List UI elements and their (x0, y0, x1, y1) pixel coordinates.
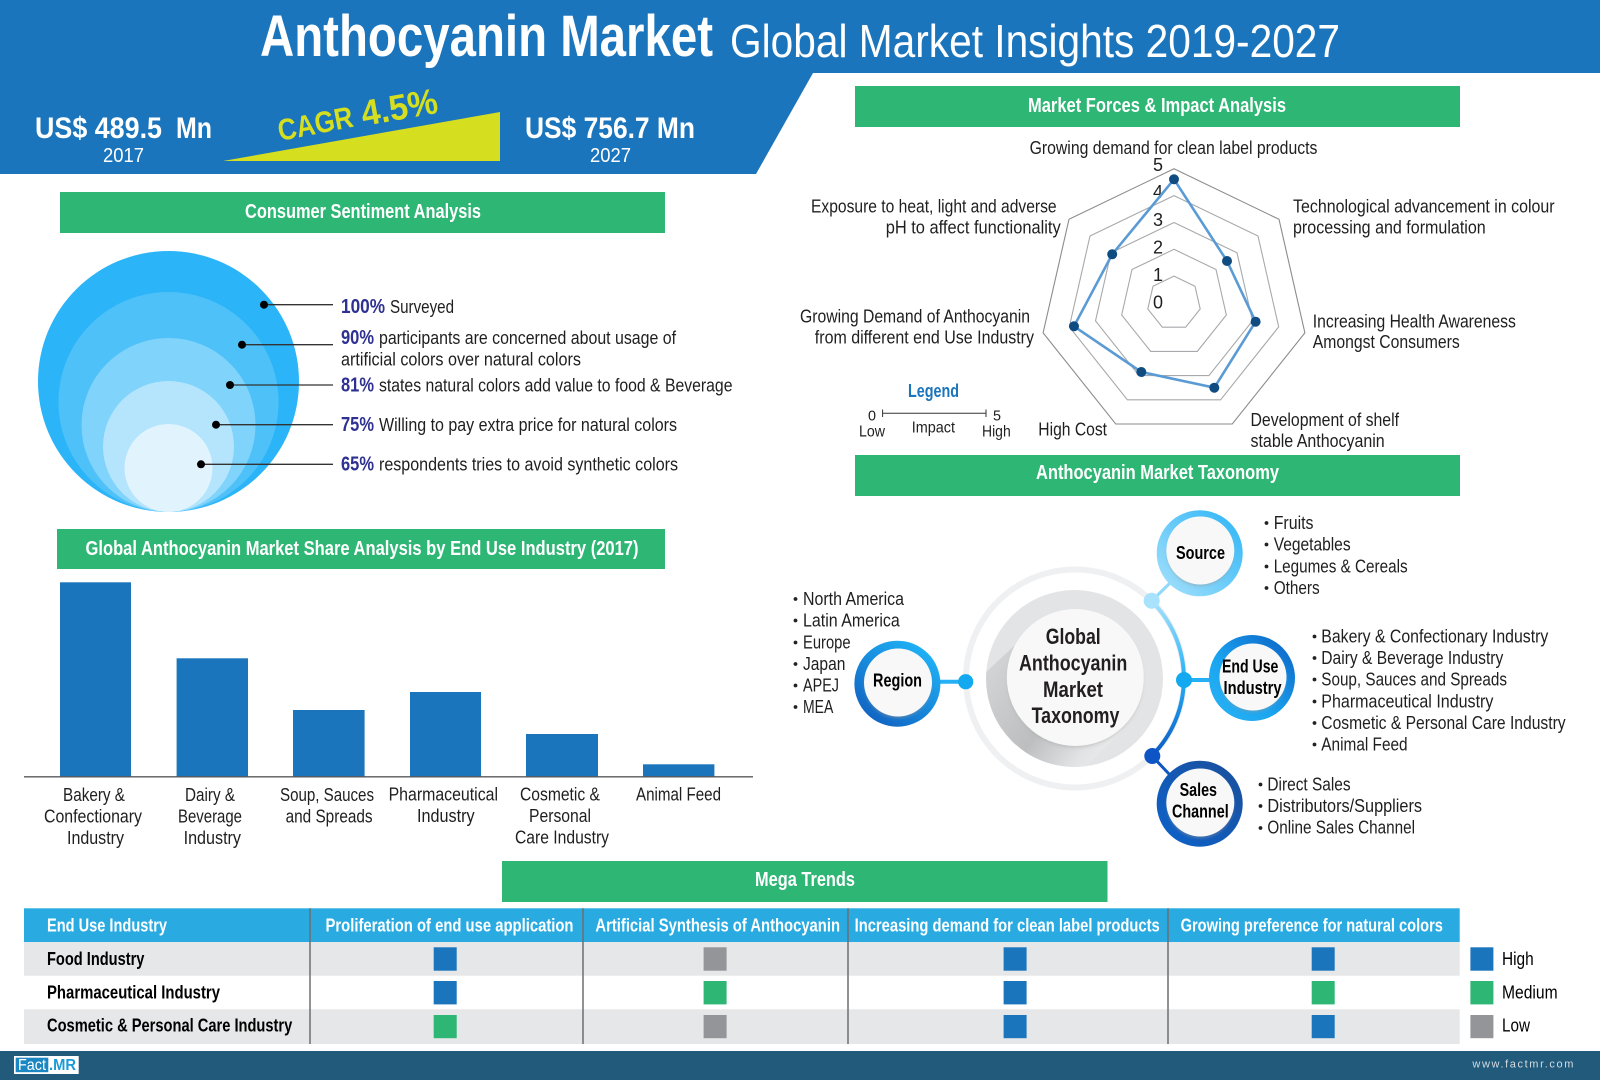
radar label: technological advancement (1293, 196, 1555, 238)
hub title: Taxonomy (1032, 703, 1120, 728)
sentiment callout: 90% (238, 327, 677, 370)
node: end use industry (1176, 635, 1295, 721)
list: region (794, 589, 905, 717)
heading: consumer sentiment: Consumer Sentiment Analysis (245, 201, 481, 223)
node: sales channel: Channel (1172, 802, 1229, 822)
logo: Fact.MR: .MR (49, 1057, 76, 1074)
radar legend: Impact (912, 419, 956, 436)
radar label: technological advancement: Technological advancement in colour (1293, 196, 1555, 216)
sentiment callout: 90%: participants are concerned about usage of (379, 328, 677, 348)
row: pharmaceutical industry (47, 981, 1335, 1004)
radar legend: 0 (868, 408, 876, 425)
stat: 2017 market value: US$ 489.5 (35, 112, 162, 145)
table legend: High (1502, 949, 1534, 969)
list: sales channel (1259, 775, 1422, 838)
table legend (1470, 947, 1558, 1038)
bar label: bakery: Bakery & (63, 785, 125, 805)
radar label: health awareness: Increasing Health Awareness (1313, 312, 1516, 332)
logo: Fact.MR: Fact (18, 1057, 46, 1074)
radar legend: 5 (993, 408, 1001, 425)
sentiment callout: 100% (260, 296, 454, 318)
radar axis numbers (1153, 155, 1163, 312)
sentiment callout: 81%: states natural colors add value to food & Beverage (379, 376, 732, 396)
list: region: North America (803, 589, 905, 609)
bar label: cosmetic: Care Industry (515, 828, 609, 848)
bar label: animal feed: Animal Feed (636, 784, 721, 804)
node: end use industry: End Use (1222, 656, 1278, 676)
list: source: Vegetables (1274, 535, 1351, 555)
list: sales channel: Online Sales Channel (1267, 818, 1415, 838)
heading: market share: Global Anthocyanin Market Share Analysis by End Use Industry (2017) (86, 538, 638, 560)
heading: taxonomy: Anthocyanin Market Taxonomy (1036, 462, 1280, 484)
row: food industry (47, 947, 1335, 971)
radar data series (1069, 174, 1261, 393)
title (260, 4, 1340, 69)
radar label: technological advancement: processing and formulation (1293, 218, 1486, 238)
list: end use industry: Animal Feed (1321, 735, 1408, 755)
list: source (1265, 513, 1408, 598)
sentiment callout: 90%: 90% (341, 327, 374, 349)
radar legend (859, 381, 1011, 441)
bar label: cosmetic: Cosmetic & (520, 784, 600, 804)
stat: 2017 market value: Mn (176, 112, 212, 145)
node: source (1144, 510, 1243, 609)
radar label: health awareness: Amongst Consumers (1313, 332, 1460, 352)
list: sales channel: Distributors/Suppliers (1267, 796, 1422, 816)
radar label: shelf stable (1250, 410, 1400, 451)
mega trends table (24, 908, 1460, 1044)
nested circles chart (38, 251, 299, 512)
list: end use industry: Bakery & Confectionary Industry (1321, 626, 1548, 646)
radar label: exposure: Exposure to heat, light and adverse (811, 196, 1057, 216)
row: food industry: Food Industry (47, 949, 144, 969)
radar label: shelf stable: Development of shelf (1250, 410, 1400, 430)
heading: market forces (855, 86, 1460, 127)
website url: www.factmr.com (1471, 1058, 1573, 1070)
table legend: Low (1502, 1016, 1531, 1036)
heading: mega trends (502, 861, 1108, 902)
radar legend: Legend (908, 381, 959, 401)
sentiment callout: 90%: artificial colors over natural colors (341, 350, 581, 370)
bar label: bakery: Confectionary (44, 806, 142, 826)
bar label: dairy (178, 785, 242, 848)
bar label: dairy: Dairy & (185, 785, 235, 805)
node: end use industry: Industry (1224, 678, 1282, 698)
heading: market share (57, 529, 665, 569)
table header row: Growing preference for natural colors (1181, 916, 1443, 936)
list: region: Europe (803, 632, 851, 652)
hub title: Market (1043, 677, 1104, 702)
sentiment callout: 81%: 81% (341, 375, 374, 397)
list: end use industry: Cosmetic & Personal Care Industry (1321, 713, 1566, 733)
list: end use industry (1313, 626, 1566, 755)
list: end use industry: Pharmaceutical Industry (1321, 691, 1493, 711)
bar chart (24, 582, 753, 848)
CAGR wedge: CAGR (275, 101, 356, 148)
row: pharmaceutical industry: Pharmaceutical Industry (47, 982, 220, 1002)
stat: 2027 market value: 2027 (590, 145, 631, 167)
footer bar (0, 1051, 1600, 1080)
list: sales channel: Direct Sales (1267, 775, 1351, 795)
bar label: pharmaceutical (389, 784, 498, 826)
heading: consumer sentiment (60, 192, 665, 233)
hub title: Anthocyanin (1019, 651, 1127, 676)
radar axis numbers: 3 (1153, 210, 1163, 230)
radar chart (1043, 155, 1305, 424)
radar legend: High (982, 424, 1011, 441)
radar legend: Low (859, 424, 885, 441)
radar label: exposure: pH to affect functionality (886, 218, 1061, 238)
bar label: bakery (44, 785, 142, 848)
radar label: end use demand: from different end Use Industry (815, 328, 1034, 348)
title: Anthocyanin Market (260, 4, 713, 69)
sentiment callout: 75%: Willing to pay extra price for natural colors (379, 415, 677, 435)
radar label: shelf stable: stable Anthocyanin (1250, 431, 1385, 451)
radar label: clean label: Growing demand for clean label products (1030, 138, 1317, 158)
CAGR wedge (223, 80, 500, 161)
bar label: dairy: Industry (184, 828, 241, 848)
sentiment callout: 100%: Surveyed (390, 297, 454, 317)
stat: 2027 market value: US$ 756.7 Mn (525, 112, 695, 145)
radar label: high cost: High Cost (1038, 420, 1107, 440)
list: region: MEA (803, 697, 833, 717)
radar axis numbers: 5 (1153, 155, 1163, 175)
stat: 2027 market value (525, 112, 695, 167)
header banner (0, 0, 1600, 174)
table header row: Artificial Synthesis of Anthocyanin (595, 916, 840, 936)
list: source: Legumes & Cereals (1274, 556, 1408, 576)
list: region: Japan (803, 654, 845, 674)
table header row: End Use Industry (47, 916, 167, 936)
bar label: soup: Soup, Sauces (280, 785, 374, 805)
stat: 2017 market value: 2017 (103, 145, 144, 167)
radar label: exposure (811, 196, 1061, 238)
radar axis numbers: 0 (1153, 292, 1163, 312)
radar axis numbers: 4 (1153, 182, 1163, 202)
table header row: Proliferation of end use application (326, 916, 574, 936)
node: source: Source (1176, 543, 1225, 563)
CAGR wedge: 4.5% (358, 80, 441, 134)
radar label: end use demand: Growing Demand of Anthocyanin (800, 306, 1030, 326)
table header row: Increasing demand for clean label products (855, 916, 1160, 936)
list: end use industry: Dairy & Beverage Industry (1321, 648, 1503, 668)
radar axis numbers: 2 (1153, 238, 1163, 258)
sentiment callout: 65%: respondents tries to avoid synthetic colors (379, 455, 678, 475)
node: sales channel (1144, 748, 1243, 847)
sentiment callout: 75%: 75% (341, 414, 374, 436)
list: source: Others (1274, 578, 1320, 598)
title: Global Market Insights 2019-2027 (730, 15, 1340, 67)
heading: taxonomy (855, 455, 1460, 496)
hub title: Global (1046, 624, 1101, 649)
hub title (1019, 624, 1127, 728)
table legend: Medium (1502, 982, 1558, 1002)
radar axis numbers: 1 (1153, 265, 1163, 285)
bar label: cosmetic (515, 784, 609, 848)
stat: 2017 market value (35, 112, 212, 167)
sentiment callout: 65% (197, 454, 678, 476)
node: region: Region (873, 671, 922, 691)
node: sales channel: Sales (1180, 780, 1217, 800)
row: cosmetic and personal care industry (47, 1015, 1335, 1038)
row: cosmetic and personal care industry: Cosmetic & Personal Care Industry (47, 1016, 292, 1036)
logo: Fact.MR (14, 1056, 79, 1074)
bar label: pharmaceutical: Industry (417, 806, 475, 826)
bar label: pharmaceutical: Pharmaceutical (389, 784, 498, 804)
sentiment callout: 75% (212, 414, 677, 436)
bar label: soup: and Spreads (286, 806, 373, 826)
node: region (854, 641, 973, 727)
bar label: soup (280, 785, 374, 826)
bar label: cosmetic: Personal (529, 806, 591, 826)
sentiment callout: 100%: 100% (341, 296, 385, 318)
radar label: health awareness (1313, 312, 1516, 352)
taxonomy hub (963, 566, 1187, 790)
list: end use industry: Soup, Sauces and Spreads (1321, 670, 1507, 690)
heading: mega trends: Mega Trends (755, 869, 855, 891)
list: source: Fruits (1274, 513, 1314, 533)
list: region: Latin America (803, 610, 901, 630)
heading: market forces: Market Forces & Impact Analysis (1028, 95, 1286, 117)
sentiment callout: 81% (226, 375, 732, 397)
bar label: bakery: Industry (67, 828, 124, 848)
list: region: APEJ (803, 676, 839, 696)
bar label: dairy: Beverage (178, 806, 242, 826)
radar label: end use demand (800, 306, 1034, 348)
table header row (47, 916, 1443, 936)
sentiment callout: 65%: 65% (341, 454, 374, 476)
